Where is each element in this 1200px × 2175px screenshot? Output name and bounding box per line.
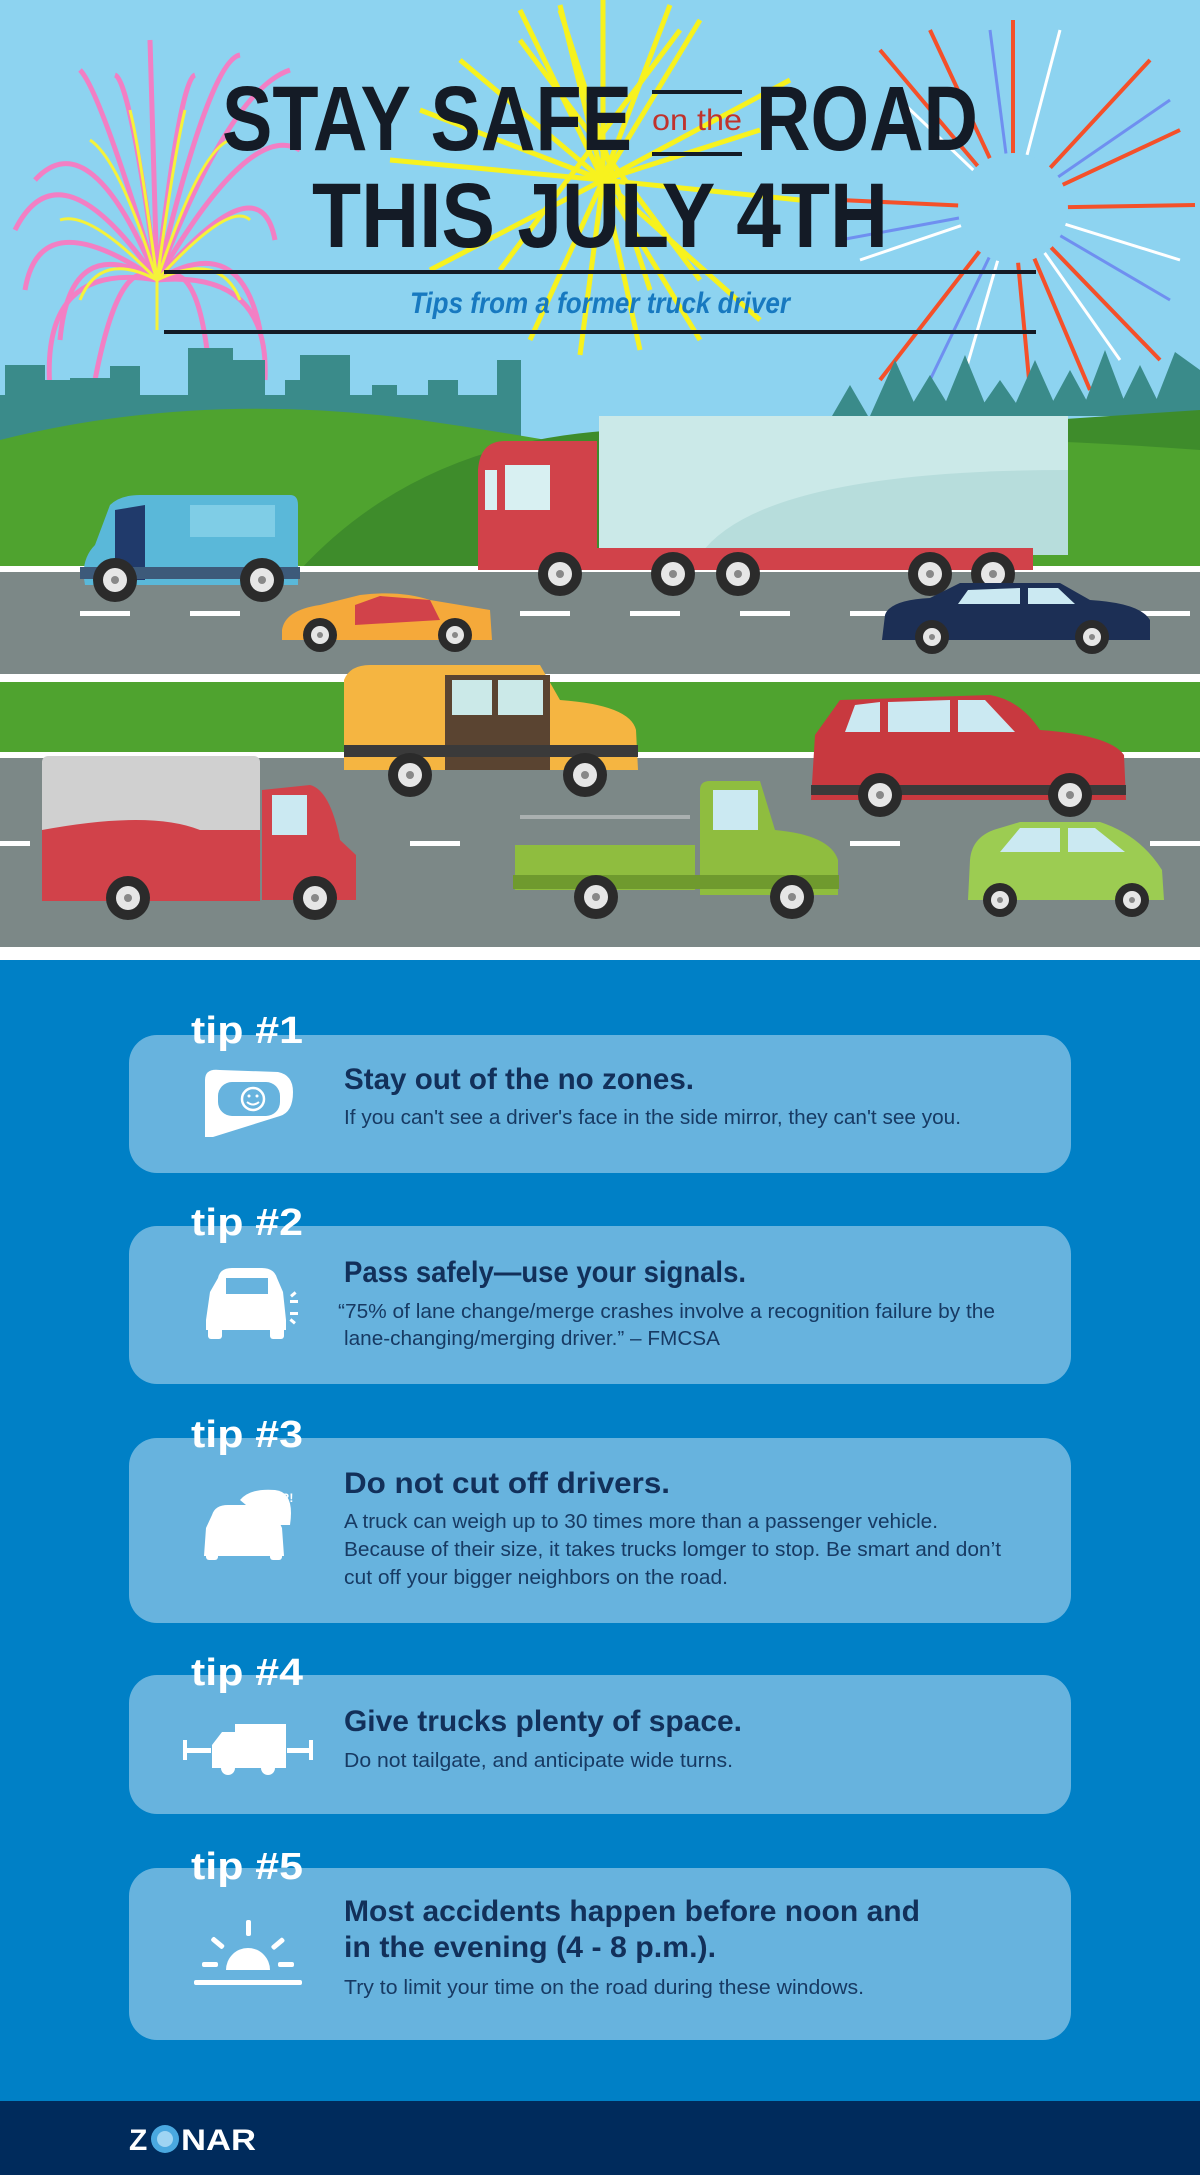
- title: ROAD: [756, 68, 978, 170]
- logo: ZONAR: NAR: [181, 2124, 256, 2157]
- subtitle with rules: Tips from a former truck driver: [410, 287, 792, 320]
- footer: [0, 2101, 1200, 2175]
- vehicle: light green car: [968, 822, 1164, 917]
- card: tip 1: Stay out of the no zones.: [344, 1063, 694, 1096]
- card: tip 5: [129, 1846, 1071, 2040]
- vehicle: green pickup: [513, 781, 839, 919]
- logo: ZONAR: [129, 2124, 256, 2157]
- icon: two cars: ?!: [282, 1491, 293, 1505]
- hills: [0, 409, 700, 570]
- card: tip 3: Because of their size, it takes trucks lomger to stop. Be smart and don’t: [344, 1539, 1001, 1561]
- card: tip 2: Pass safely—use your signals.: [344, 1256, 746, 1289]
- icon: car with signal: [206, 1268, 298, 1339]
- card: tip 5: tip #5: [191, 1846, 303, 1888]
- vehicle: blue van: [80, 495, 300, 602]
- icon: two cars: [204, 1490, 293, 1560]
- card: tip 2: “75% of lane change/merge crashes involve a recognition failure by the: [338, 1301, 995, 1323]
- vehicle: orange sports car: [282, 593, 492, 652]
- card: tip 3: cut off your bigger neighbors on the road.: [344, 1567, 728, 1589]
- subtitle with rules: [164, 270, 1036, 334]
- card: tip 5: Try to limit your time on the road during these windows.: [344, 1977, 864, 1999]
- tips section background: [0, 960, 1200, 2101]
- title: STAY SAFE: [222, 68, 632, 170]
- card: tip 3: tip #3: [191, 1414, 303, 1456]
- card: tip 2: tip #2: [191, 1202, 303, 1244]
- firework: red white blue: [840, 20, 1195, 390]
- road lower: [0, 752, 1200, 758]
- card: tip 3: Do not cut off drivers.: [344, 1467, 670, 1500]
- title: on the: [652, 104, 742, 137]
- card: tip 1: tip #1: [191, 1010, 303, 1052]
- card: tip 5: Most accidents happen before noon and: [344, 1895, 920, 1928]
- title: THIS JULY 4TH: [312, 165, 888, 267]
- card: tip 4: tip #4: [191, 1652, 303, 1694]
- road upper: [0, 566, 1200, 572]
- card: tip 5: in the evening (4 - 8 p.m.).: [344, 1931, 716, 1964]
- card: tip 4: Do not tailgate, and anticipate wide turns.: [344, 1750, 733, 1772]
- card: tip 2: [129, 1202, 1071, 1384]
- icon: truck with spacing: [183, 1724, 313, 1775]
- icon: side mirror: [205, 1070, 293, 1137]
- sky background: [0, 0, 1200, 960]
- skyline: [0, 348, 1200, 445]
- vehicle: navy sedan: [882, 583, 1150, 654]
- card: tip 1: If you can't see a driver's face in the side mirror, they can't see you.: [344, 1107, 961, 1129]
- card: tip 4: [129, 1652, 1071, 1814]
- card: tip 2: lane-changing/merging driver.” – FMCSA: [344, 1328, 721, 1350]
- vehicle: red SUV: [811, 695, 1126, 817]
- card: tip 4: Give trucks plenty of space.: [344, 1705, 742, 1738]
- logo: ZONAR: Z: [129, 2124, 147, 2157]
- card: tip 3: A truck can weigh up to 30 times more than a passenger vehicle.: [344, 1511, 938, 1533]
- vehicle: box truck: [42, 756, 356, 920]
- firework: pink: [15, 40, 300, 390]
- vehicle: yellow/brown SUV: [344, 665, 638, 797]
- title: [222, 68, 978, 267]
- median grass: [0, 682, 1200, 756]
- firework: yellow: [390, 0, 800, 355]
- card: tip 1: [129, 1010, 1071, 1173]
- card: tip 3: [129, 1414, 1071, 1623]
- icon: sunset: [194, 1920, 302, 1985]
- vehicle: semi truck: [478, 416, 1068, 596]
